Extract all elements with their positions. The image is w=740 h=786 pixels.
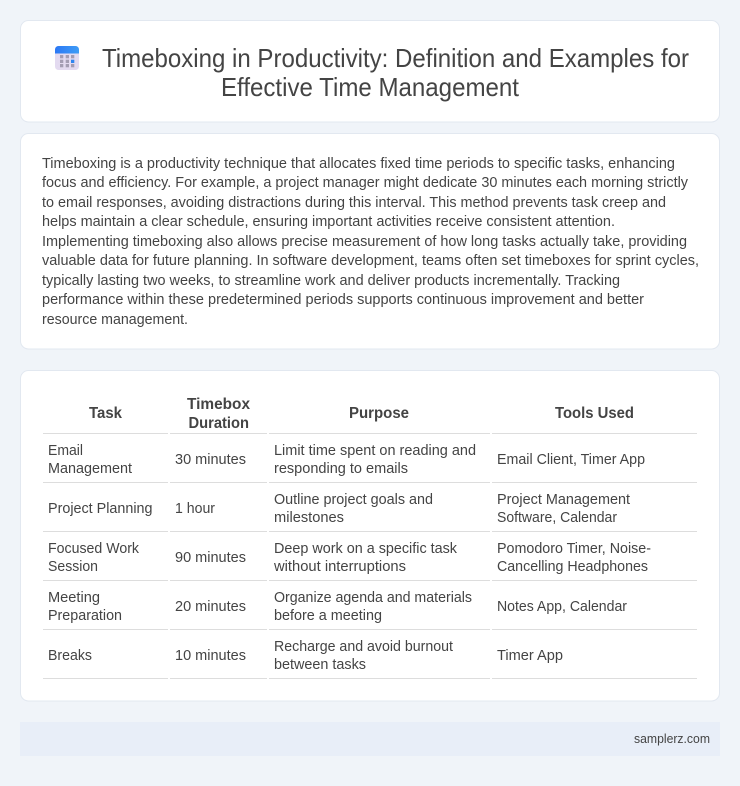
row: project planning: Project Planning xyxy=(48,501,152,517)
row: breaks: 10 minutes xyxy=(175,648,246,664)
row: project planning: Outline project goals and xyxy=(274,492,433,508)
row: meeting preparation: Meeting xyxy=(48,590,100,606)
row: focused work session: Session xyxy=(48,559,98,575)
text block: description: to email responses, avoiding distractions during this interval. This method prevents task creep and xyxy=(42,195,666,211)
text block: description: resource management. xyxy=(42,312,188,328)
heading: title: Effective Time Management xyxy=(221,74,519,102)
text block: description: performance within these predetermined periods supports continuous improvement and better xyxy=(42,292,644,308)
row: email management: Management xyxy=(48,461,132,477)
table header row: Duration xyxy=(188,415,249,432)
row: focused work session xyxy=(48,541,651,575)
icon: calendar xyxy=(55,46,79,70)
row: focused work session: 90 minutes xyxy=(175,550,246,566)
panel: title card xyxy=(20,20,720,122)
row: meeting preparation: Preparation xyxy=(48,608,122,624)
text block: description: Timeboxing is a productivity technique that allocates fixed time periods to specific tasks, enhancing xyxy=(42,156,675,172)
row: project planning: Software, Calendar xyxy=(497,510,617,526)
text block: description xyxy=(42,156,699,328)
table: timeboxing tasks xyxy=(43,396,697,679)
panel: table card xyxy=(20,370,720,701)
panel: intro paragraph xyxy=(20,134,720,349)
footer source text: samplerz.com xyxy=(634,731,710,746)
text block: description: typically lasting two weeks, to streamline work and deliver products incrementally. Tracking xyxy=(42,273,620,289)
text block: description: helps maintain a clear schedule, ensuring important activities receive consistent attention. xyxy=(42,214,615,230)
row: focused work session: Cancelling Headphones xyxy=(497,559,648,575)
row: breaks: Recharge and avoid burnout xyxy=(274,639,453,655)
row: focused work session: Deep work on a specific task xyxy=(274,541,458,557)
row: breaks xyxy=(48,639,563,673)
row: email management: 30 minutes xyxy=(175,452,246,468)
row: breaks: between tasks xyxy=(274,657,366,673)
row: meeting preparation: Organize agenda and materials xyxy=(274,590,472,606)
row: email management: Email xyxy=(48,443,83,459)
row: email management: responding to emails xyxy=(274,461,408,477)
text block: description: focus and efficiency. For example, a project manager might dedicate 30 minutes each morning strictly xyxy=(42,175,689,191)
text block: description: Implementing timeboxing also allows precise measurement of how long tasks actually take, providing xyxy=(42,234,687,250)
footer bar xyxy=(20,722,720,756)
row: meeting preparation: before a meeting xyxy=(274,608,382,624)
row: focused work session: Pomodoro Timer, Noise- xyxy=(497,541,651,557)
table header row: Task xyxy=(89,405,122,422)
row: email management xyxy=(48,443,645,477)
row: meeting preparation: Notes App, Calendar xyxy=(497,599,627,615)
row: meeting preparation xyxy=(48,590,627,624)
table header row: Timebox xyxy=(187,396,250,413)
heading: title xyxy=(102,45,689,102)
text block: description: valuable data for future planning. In software development, teams often set timeboxes for sprint cycles, xyxy=(42,253,699,269)
row: breaks: Breaks xyxy=(48,648,92,664)
table header row: Purpose xyxy=(349,405,409,422)
row: project planning: 1 hour xyxy=(175,501,215,517)
row: focused work session: Focused Work xyxy=(48,541,140,557)
row: project planning xyxy=(48,492,630,526)
row: project planning: milestones xyxy=(274,510,344,526)
row: email management: Limit time spent on reading and xyxy=(274,443,476,459)
table header row xyxy=(89,396,634,432)
row: meeting preparation: 20 minutes xyxy=(175,599,246,615)
row: breaks: Timer App xyxy=(497,648,563,664)
row: focused work session: without interruptions xyxy=(273,559,406,575)
heading: title: Timeboxing in Productivity: Definition and Examples for xyxy=(102,45,689,73)
table header row: Tools Used xyxy=(555,405,634,422)
row: email management: Email Client, Timer App xyxy=(497,452,645,468)
row: project planning: Project Management xyxy=(497,492,630,508)
